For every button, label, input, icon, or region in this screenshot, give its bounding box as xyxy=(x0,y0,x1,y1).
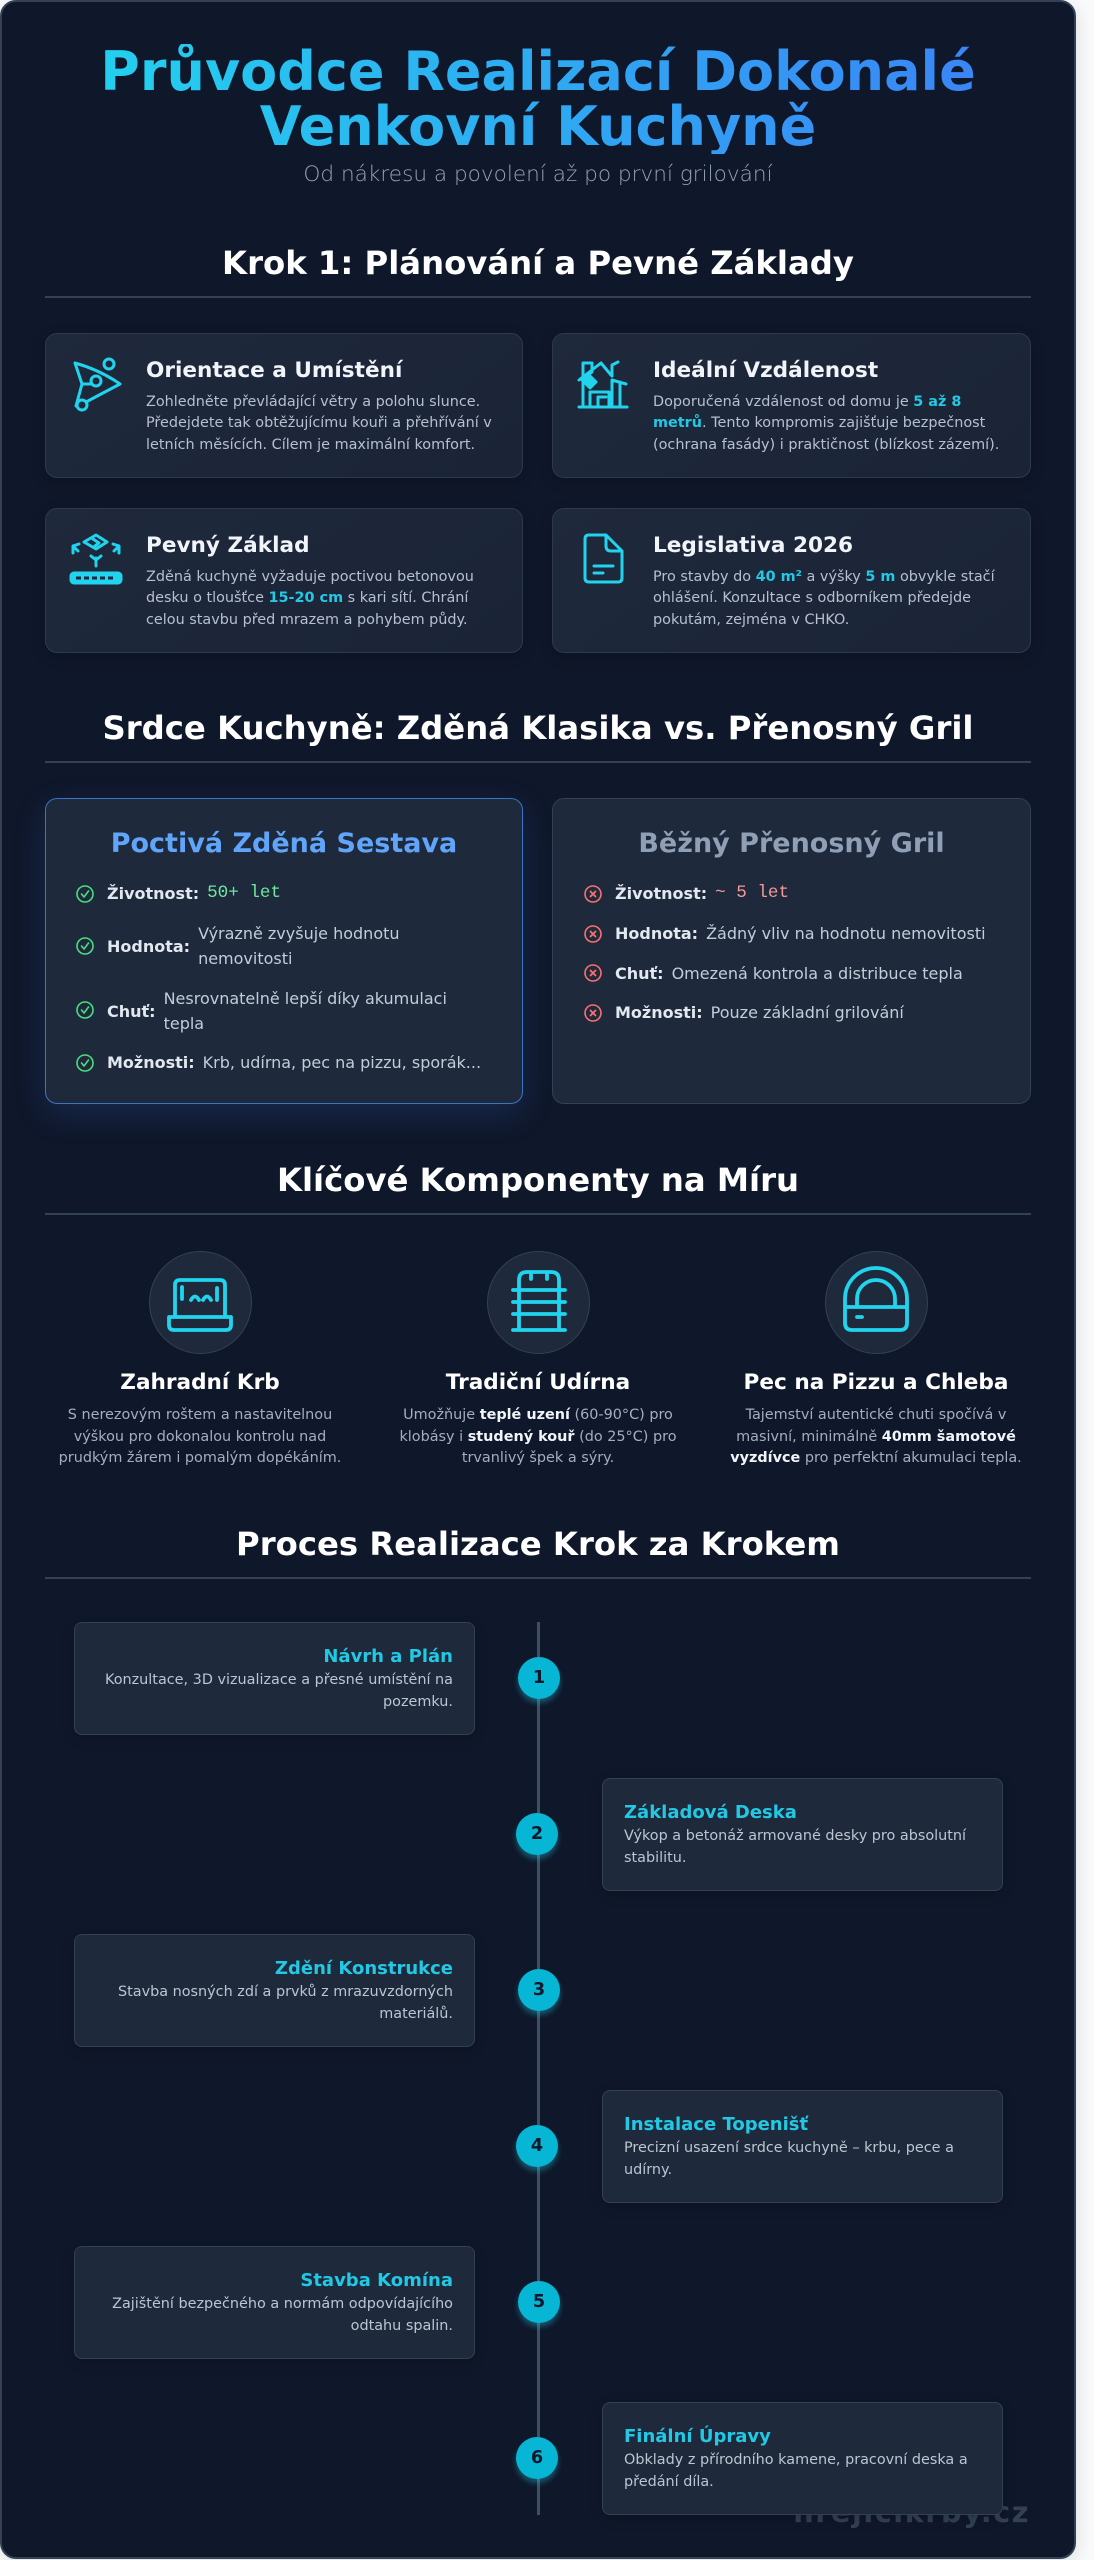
card text: letních měsících. Cílem je maximální komfort. xyxy=(146,437,475,453)
card text: celou stavbu před mrazem a pohybem půdy. xyxy=(146,612,468,628)
feature text: fireplace xyxy=(59,1407,341,1466)
step text: Konzultace, 3D vizualizace a přesné umístění na xyxy=(105,1672,453,1688)
card text: metrů. Tento kompromis zajišťuje bezpečnost xyxy=(653,415,985,431)
step text: Výkop a betonáž armované desky pro absolutní xyxy=(624,1828,966,1844)
step 2 node: 2 xyxy=(531,1824,543,1844)
row: lifetime xyxy=(615,883,789,903)
row: options: Krb, udírna, pec na pizzu, sporák... xyxy=(203,1053,481,1072)
row: taste: Chuť: xyxy=(615,964,664,983)
row: lifetime: Životnost: xyxy=(107,884,199,903)
feature title: pizza oven: Pec na Pizzu a Chleba xyxy=(744,1370,1008,1395)
card title: Orientace a Umístění xyxy=(146,358,402,383)
row: lifetime xyxy=(107,883,281,903)
step text xyxy=(624,1828,966,1866)
step text xyxy=(112,2296,453,2334)
heading: comparison: Srdce Kuchyně: Zděná Klasika vs. Přenosný Gril xyxy=(102,709,974,747)
feature text: smokehouse: klobásy i studený kouř (do 25°C) pro xyxy=(399,1429,677,1445)
step 3 node xyxy=(518,1969,560,2011)
card title: Legislativa 2026 xyxy=(653,533,853,558)
row: taste xyxy=(107,989,447,1033)
watermark: hrejicikrby.cz xyxy=(793,2495,1030,2529)
step 1 card xyxy=(74,1622,475,1735)
step text xyxy=(105,1672,453,1710)
step 6 node xyxy=(516,2437,558,2479)
feature text: fireplace: S nerezovým roštem a nastavitelnou xyxy=(68,1407,332,1423)
feature text: smokehouse: trvanlivý špek a sýry. xyxy=(462,1450,614,1466)
step 4 node: 4 xyxy=(531,2136,543,2156)
row: value: Hodnota: xyxy=(615,924,698,943)
feature text: smokehouse: Umožňuje teplé uzení (60-90°C) pro xyxy=(403,1407,673,1423)
title: Průvodce Realizací Dokonalé xyxy=(100,40,976,103)
step 6 node: 6 xyxy=(531,2448,543,2468)
heading: process: Proces Realizace Krok za Krokem xyxy=(236,1525,840,1563)
step title: Návrh a Plán xyxy=(323,1646,453,1667)
feature text: pizza oven: Tajemství autentické chuti spočívá v xyxy=(746,1407,1006,1423)
step 2 card xyxy=(602,1778,1003,1891)
icon circle: smokehouse xyxy=(487,1250,590,1354)
feature text: pizza oven: masivní, minimálně 40mm šamotové xyxy=(736,1429,1016,1445)
subtitle: Od nákresu a povolení až po první grilování xyxy=(303,162,773,187)
card title: Pevný Základ xyxy=(146,533,310,558)
row: options: Pouze základní grilování xyxy=(711,1003,904,1022)
step 6 card xyxy=(602,2402,1003,2515)
step text: Zajištění bezpečného a normám odpovídajícího xyxy=(112,2296,453,2312)
step 5 node xyxy=(518,2281,560,2323)
heading: step 1: Krok 1: Plánování a Pevné Základy xyxy=(222,244,854,282)
step text: předání díla. xyxy=(624,2474,714,2490)
card text xyxy=(653,394,999,453)
card text xyxy=(653,568,995,628)
panel title: Běžný Přenosný Gril xyxy=(638,828,945,859)
step 4 node xyxy=(516,2125,558,2167)
row: value xyxy=(107,924,400,968)
card text: (ochrana fasády) i praktičnost (blízkost zázemí). xyxy=(653,437,999,453)
step text: odtahu spalin. xyxy=(351,2318,453,2334)
card text: Zohledněte převládající větry a polohu slunce. xyxy=(146,394,480,410)
step title: Základová Deska xyxy=(624,1802,797,1823)
icons: cross marks xyxy=(584,885,602,1022)
icon: foundation xyxy=(70,534,122,584)
card text: Zděná kuchyně vyžaduje poctivou betonovou xyxy=(146,568,474,584)
heading: components xyxy=(45,1159,1031,1215)
step text: Obklady z přírodního kamene, pracovní deska a xyxy=(624,2452,968,2468)
icon: smokehouse xyxy=(511,1270,567,1332)
row: taste: Nesrovnatelně lepší díky akumulaci xyxy=(164,989,447,1008)
feature title: fireplace: Zahradní Krb xyxy=(120,1370,280,1395)
icon: pizza oven xyxy=(843,1266,909,1332)
panel: portable grill xyxy=(552,798,1031,1104)
card text: Doporučená vzdálenost od domu je 5 až 8 xyxy=(653,394,961,410)
step text: stabilitu. xyxy=(624,1850,686,1866)
feature text: fireplace: výškou pro dokonalou kontrolu nad xyxy=(74,1429,326,1445)
step text: materiálů. xyxy=(379,2006,453,2022)
heading: comparison xyxy=(45,707,1031,763)
card text: Předejdete tak obtěžujícímu kouři a přehřívání v xyxy=(146,415,492,431)
panel: foundation xyxy=(45,508,523,653)
timeline line xyxy=(536,1622,540,2515)
row: value: nemovitosti xyxy=(198,949,292,968)
step title: Instalace Topenišť xyxy=(624,2114,808,2135)
row: taste: Chuť: xyxy=(107,1002,156,1020)
title xyxy=(60,44,1016,154)
step text xyxy=(624,2140,954,2178)
panel: legislation xyxy=(552,508,1031,653)
heading: process xyxy=(45,1523,1031,1579)
row: taste: Omezená kontrola a distribuce tepla xyxy=(672,964,963,983)
step text: udírny. xyxy=(624,2162,672,2178)
row: lifetime: 50+ let xyxy=(207,883,281,903)
card title: Ideální Vzdálenost xyxy=(653,358,878,383)
step text xyxy=(624,2452,968,2490)
panel: orientation xyxy=(45,333,523,478)
row: value: Žádný vliv na hodnotu nemovitosti xyxy=(706,924,986,943)
row: options: Možnosti: xyxy=(615,1003,703,1022)
icon: house distance xyxy=(577,360,628,408)
heading: step 1 xyxy=(45,242,1031,298)
step 3 card xyxy=(74,1934,475,2047)
title: Venkovní Kuchyně xyxy=(260,95,816,158)
card text: pokutám, zejména v CHKO. xyxy=(653,612,849,628)
step title: Finální Úpravy xyxy=(624,2426,771,2447)
list: built kitchen xyxy=(107,883,481,1072)
panel: distance xyxy=(552,333,1031,478)
panel: built kitchen xyxy=(45,798,523,1104)
step 3 node: 3 xyxy=(533,1980,545,2000)
feature text: pizza oven: vyzdívce pro perfektní akumulaci tepla. xyxy=(730,1450,1022,1466)
step 4 card xyxy=(602,2090,1003,2203)
step text: Stavba nosných zdí a prvků z mrazuvzdorných xyxy=(118,1984,453,2000)
feature text: smokehouse xyxy=(399,1407,677,1466)
step 1 node: 1 xyxy=(533,1668,545,1688)
heading: components: Klíčové Komponenty na Míru xyxy=(277,1161,799,1199)
feature text: fireplace: prudkým žárem i pomalým dopékáním. xyxy=(59,1450,341,1466)
row: options xyxy=(615,1003,904,1022)
icon: fireplace xyxy=(167,1278,233,1332)
icons: check marks xyxy=(76,885,94,1072)
card text xyxy=(146,568,474,628)
row: lifetime: Životnost: xyxy=(615,884,707,903)
card text: desku o tloušťce 15-20 cm s kari sítí. Chrání xyxy=(146,590,468,606)
step title: Stavba Komína xyxy=(300,2270,453,2291)
icon circle: pizza oven xyxy=(825,1250,928,1354)
row: value: Hodnota: xyxy=(107,936,190,956)
card text: Pro stavby do 40 m² a výšky 5 m obvykle stačí xyxy=(653,568,995,584)
icon circle: fireplace xyxy=(148,1250,252,1354)
step text xyxy=(118,1984,453,2022)
card text: ohlášení. Konzultace s odborníkem předejde xyxy=(653,590,971,606)
list: portable grill xyxy=(615,883,986,1022)
feature text: pizza oven xyxy=(730,1407,1022,1466)
icon: orientation xyxy=(74,358,122,412)
row: taste: tepla xyxy=(164,1014,204,1033)
step 5 node: 5 xyxy=(533,2292,545,2312)
row: options: Možnosti: xyxy=(107,1053,195,1072)
step 1 node xyxy=(518,1657,560,1699)
panel title: Poctivá Zděná Sestava xyxy=(111,828,457,859)
step text: Precizní usazení srdce kuchyně – krbu, pece a xyxy=(624,2140,954,2156)
step 2 node xyxy=(516,1813,558,1855)
step title: Zdění Konstrukce xyxy=(275,1958,453,1979)
row: lifetime: ~ 5 let xyxy=(715,883,789,903)
step 5 card xyxy=(74,2246,475,2359)
icon: document xyxy=(584,534,624,584)
card text xyxy=(146,394,492,453)
row: value: Výrazně zvyšuje hodnotu xyxy=(198,924,400,943)
feature title: smokehouse: Tradiční Udírna xyxy=(446,1370,630,1395)
step text: pozemku. xyxy=(383,1694,453,1710)
